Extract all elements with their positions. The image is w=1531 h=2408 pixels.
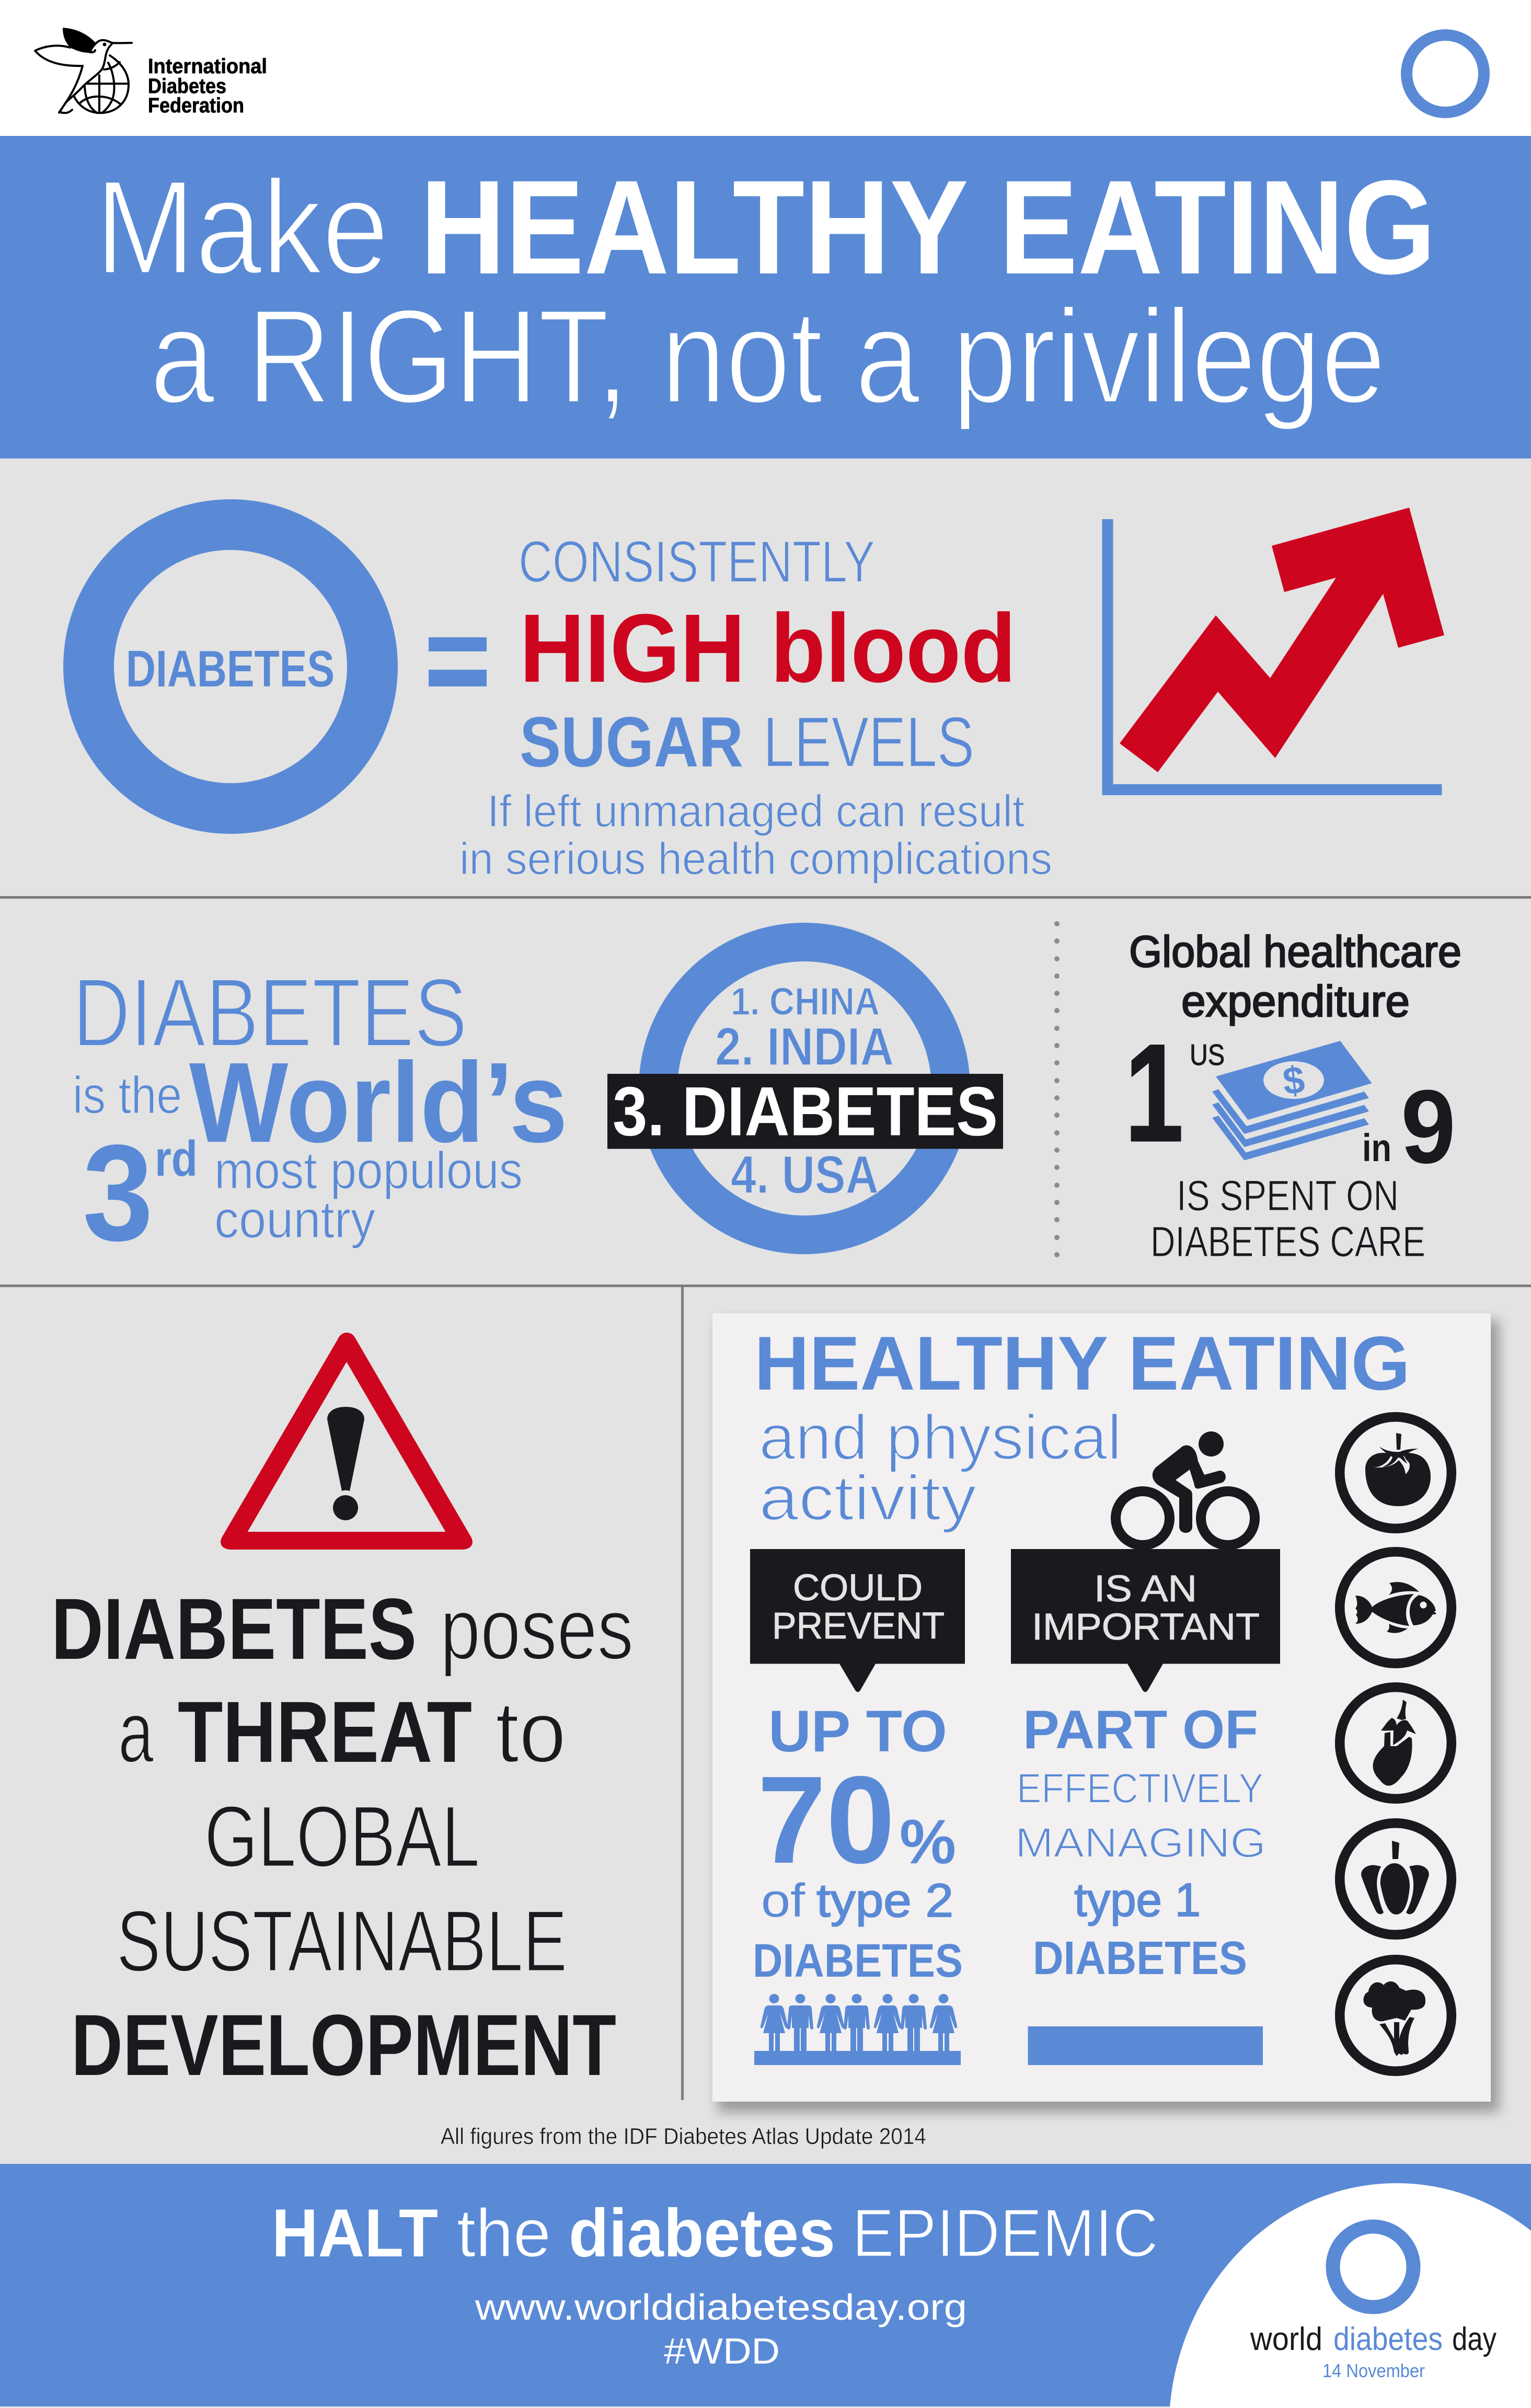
icon: eggplant	[1340, 1687, 1452, 1799]
healthcare expenditure block: Global healthcare	[1129, 927, 1461, 976]
panel: threat	[51, 1333, 634, 2094]
footer headline: the	[457, 2195, 551, 2271]
icon: fish	[1340, 1552, 1452, 1664]
logo wordmark: Diabetes	[148, 75, 226, 98]
definition text: SUGAR	[520, 702, 743, 782]
footer headline: HALT	[272, 2195, 438, 2271]
threat statement: a	[118, 1684, 154, 1781]
icon: cyclist	[1115, 1431, 1254, 1545]
logo: International Diabetes Federation	[35, 28, 267, 117]
blue bar	[1028, 2026, 1263, 2065]
threat statement: poses	[440, 1581, 634, 1678]
badge wordmark: world	[1250, 2321, 1322, 2357]
definition text: in serious health complications	[459, 834, 1052, 884]
ranking ring: 2. INDIA	[715, 1017, 894, 1076]
definition text	[459, 529, 1052, 884]
callout: could prevent: PREVENT	[772, 1606, 945, 1647]
badge wordmark: day	[1452, 2321, 1497, 2357]
definition text: LEVELS	[763, 702, 974, 782]
chart: rising red arrow	[1102, 508, 1444, 795]
big blue ring with DIABETES: DIABETES	[126, 640, 335, 697]
title band	[0, 136, 1531, 458]
healthcare expenditure block: in	[1362, 1126, 1391, 1169]
definition text: CONSISTENTLY	[519, 529, 875, 594]
footer headline: EPIDEMIC	[852, 2195, 1158, 2271]
healthcare expenditure block: 9	[1401, 1069, 1456, 1185]
divider vertical	[681, 1286, 684, 2100]
ranking ring	[607, 942, 1003, 1235]
icon: warning triangle	[221, 1333, 473, 1550]
icon: blue circle top right	[1407, 35, 1484, 112]
text block: DIABETES is the World's 3rd most populous country: World’s	[189, 1039, 568, 1166]
column: part of effectively managing type 1 diabetes: MANAGING	[1015, 1819, 1266, 1866]
threat statement: to	[496, 1684, 566, 1781]
healthcare expenditure block: expenditure	[1181, 977, 1410, 1026]
icon: row of people	[754, 1994, 961, 2065]
panel heading: activity	[759, 1462, 976, 1533]
column: up to 70% of type 2 diabetes: DIABETES	[753, 1935, 963, 1987]
date: 14 November	[1322, 2360, 1425, 2381]
healthcare expenditure block: DIABETES CARE	[1150, 1218, 1425, 1266]
text block: DIABETES is the World's 3rd most populous country: country	[214, 1190, 375, 1249]
website and hashtag: www.worlddiabetesday.org	[475, 2287, 967, 2327]
badge wordmark	[1250, 2321, 1497, 2357]
column: part of effectively managing type 1 diabetes	[1015, 1700, 1266, 2065]
ranking ring: 1. CHINA	[731, 980, 880, 1023]
icon: stack of banknotes	[1212, 1041, 1372, 1161]
callout: is an important	[1011, 1549, 1280, 1692]
column: up to 70% of type 2 diabetes	[753, 1699, 963, 2065]
text block: DIABETES is the World's 3rd most populous country	[73, 959, 568, 1269]
icon: hummingbird and globe	[35, 28, 132, 113]
text block: DIABETES is the World's 3rd most populous country: rd	[155, 1131, 198, 1187]
header bar	[0, 0, 1531, 136]
healthcare expenditure block: IS SPENT ON	[1177, 1172, 1399, 1220]
ranking ring: 4. USA	[731, 1145, 879, 1205]
footer band: #WDD	[664, 2331, 780, 2371]
divider	[0, 1285, 1531, 1287]
callout: could prevent	[750, 1549, 965, 1692]
footer headline	[272, 2195, 1158, 2271]
logo wordmark: International	[148, 55, 267, 78]
panel heading: and physical	[759, 1402, 1122, 1473]
source note: All figures from the IDF Diabetes Atlas Update 2014	[441, 2124, 926, 2149]
column: up to 70% of type 2 diabetes: type 2	[816, 1875, 953, 1927]
badge wordmark: diabetes	[1333, 2321, 1443, 2357]
ranking ring: 3. DIABETES	[613, 1073, 998, 1150]
panel: world's 3rd most populous	[73, 921, 1461, 1269]
panel: healthy eating	[712, 1313, 1499, 2112]
panel background	[712, 1313, 1491, 2102]
world diabetes day badge	[1169, 2183, 1531, 2408]
panel heading: HEALTHY EATING	[754, 1321, 1410, 1406]
callout: is an important: IMPORTANT	[1032, 1607, 1260, 1648]
divider	[0, 896, 1531, 899]
title line 2: a RIGHT, not a privilege	[150, 282, 1386, 431]
column: up to 70% of type 2 diabetes: %	[900, 1807, 956, 1877]
logo wordmark: Federation	[148, 94, 244, 117]
column: up to 70% of type 2 diabetes: UP TO	[768, 1699, 947, 1764]
logo wordmark	[148, 55, 267, 117]
icon: broccoli	[1340, 1959, 1452, 2071]
footer headline: diabetes	[569, 2195, 835, 2271]
column: part of effectively managing type 1 diabetes: EFFECTIVELY	[1017, 1765, 1263, 1811]
callout: could prevent: COULD	[793, 1567, 923, 1609]
icon: blue ring logo	[1333, 2227, 1413, 2307]
text block: DIABETES is the World's 3rd most populous country: 3	[83, 1116, 153, 1269]
healthcare expenditure block: 1	[1125, 1016, 1183, 1171]
icon: stack of banknotes: $	[1281, 1058, 1307, 1103]
threat statement: THREAT	[178, 1684, 472, 1781]
threat statement: DEVELOPMENT	[71, 1997, 616, 2094]
panel: diabetes definition	[89, 508, 1444, 884]
column: up to 70% of type 2 diabetes: of	[761, 1875, 805, 1927]
threat statement: SUSTAINABLE	[117, 1893, 567, 1990]
column: part of effectively managing type 1 diabetes: type 1	[1074, 1874, 1201, 1927]
healthcare expenditure block	[1125, 927, 1461, 1266]
threat statement: DIABETES	[51, 1581, 417, 1678]
column: part of effectively managing type 1 diabetes: DIABETES	[1033, 1932, 1247, 1985]
text block: DIABETES is the World's 3rd most populous country: is the	[73, 1066, 182, 1125]
column: up to 70% of type 2 diabetes: 70	[757, 1751, 895, 1889]
panel shadow	[718, 1320, 1499, 2112]
dotted divider	[1054, 921, 1060, 1257]
panel heading	[754, 1321, 1410, 1533]
big blue ring with DIABETES	[89, 525, 372, 808]
equals sign	[429, 637, 487, 686]
threat statement	[51, 1581, 634, 2094]
definition text: If left unmanaged can result	[487, 786, 1024, 836]
threat statement: GLOBAL	[204, 1788, 480, 1885]
icon: tomato	[1340, 1417, 1452, 1529]
icon: pepper	[1340, 1823, 1452, 1935]
text block: DIABETES is the World's 3rd most populous country: most populous	[214, 1141, 523, 1200]
healthcare expenditure block: US	[1190, 1038, 1225, 1072]
callout: is an important: IS AN	[1094, 1568, 1197, 1610]
definition text: HIGH blood	[520, 594, 1016, 703]
text block: DIABETES is the World's 3rd most populous country: DIABETES	[73, 959, 467, 1067]
column: part of effectively managing type 1 diabetes: PART OF	[1023, 1700, 1258, 1760]
footer band	[0, 2164, 1531, 2406]
title line 1: Make	[95, 153, 389, 302]
